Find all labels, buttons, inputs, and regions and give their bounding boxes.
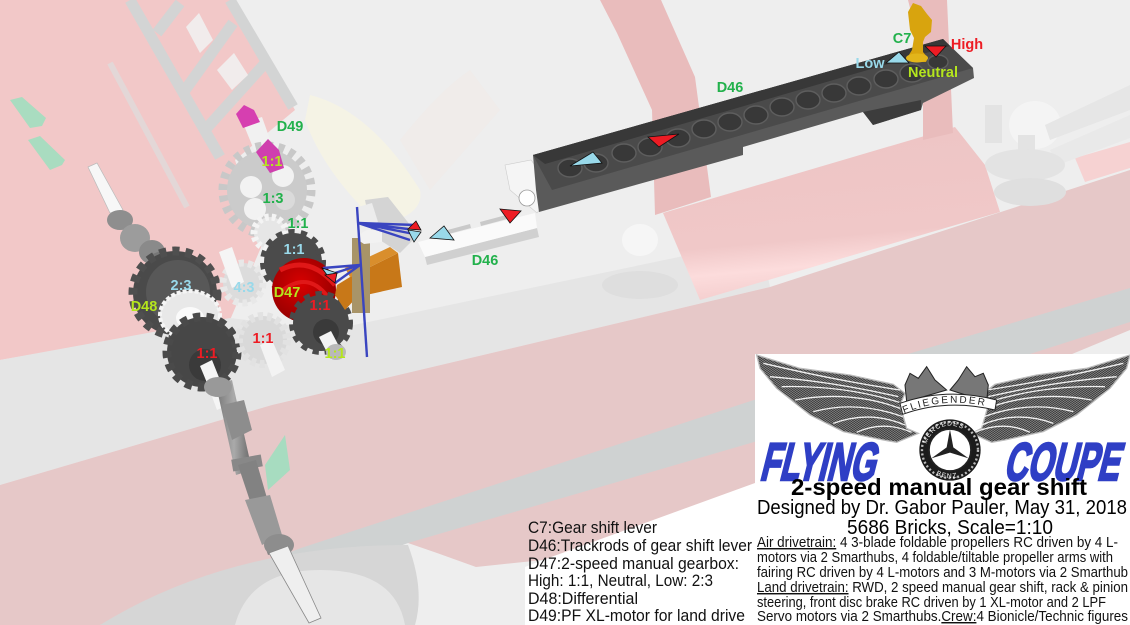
logo: Fliegender Mercedes-Benz winged badge: [756, 354, 1130, 481]
legend: part list: D48:Differential: [528, 590, 638, 608]
part labels: 1:1: [288, 216, 308, 232]
part labels: D46: [472, 253, 498, 269]
icon: low position triangles: [322, 52, 909, 275]
part labels: 1:1: [262, 154, 282, 170]
legend: part list: [528, 519, 752, 625]
logo: Fliegender Mercedes-Benz winged badge: MERCEDES: [922, 421, 964, 444]
icon: 2-speed gearbox gears: [239, 233, 349, 377]
text block: model description: Air drivetrain: 4 3-blade foldable propellers RC driven by 4 L-: [757, 535, 1118, 551]
white panel behind logo and text: [525, 354, 1130, 625]
icon: gold gear shift lever C7: [906, 3, 932, 62]
legend: part list: D49:PF XL-motor for land drive: [528, 607, 745, 625]
title: FLYING: FLYING: [756, 433, 886, 492]
icon: high position triangles: [325, 46, 946, 283]
logo: Fliegender Mercedes-Benz winged badge: BENZ: [936, 470, 957, 478]
legend: part list: D46:Trackrods of gear shift lever: [528, 537, 752, 555]
part labels: 1:3: [263, 191, 283, 207]
part labels: D48: [131, 299, 157, 315]
part labels: 1:1: [325, 346, 345, 362]
text block: model description: Servo motors via 2 Smarthubs.Crew:4 Bionicle/Technic figures: [757, 609, 1128, 625]
part labels: D46: [717, 80, 743, 96]
part labels: 4:3: [234, 280, 254, 296]
icon: 4:3 idler gear: [219, 247, 263, 303]
logo: Fliegender Mercedes-Benz winged badge: FLIEGENDER: [902, 396, 984, 413]
legend: part list: D47:2-speed manual gearbox:: [528, 555, 739, 573]
part labels: Low: [856, 56, 885, 72]
part labels: Neutral: [908, 65, 958, 81]
icon: dark gear shift track bar: [533, 39, 974, 212]
part labels: 1:1: [253, 331, 273, 347]
part labels: D49: [277, 119, 303, 135]
part labels: 1:1: [284, 242, 304, 258]
part labels: D47: [274, 285, 300, 301]
part labels: 1:1: [310, 298, 330, 314]
part labels: 2:3: [171, 278, 191, 294]
legend: part list: C7:Gear shift lever: [528, 519, 657, 537]
bricks and scale line: 5686 Bricks, Scale=1:10: [847, 517, 1053, 539]
icon: white shift linkage: [358, 160, 555, 265]
part labels: C7: [893, 31, 911, 47]
icon: driveshaft upper axle and joints: [88, 163, 168, 275]
blue shift indicator lines: [323, 207, 416, 357]
icon: motor gear assembly: [223, 105, 311, 249]
heading: 2-speed manual gear shift: 2-speed manual gear shift: [791, 474, 1087, 500]
part labels: 1:1: [197, 346, 217, 362]
part labels: [131, 31, 983, 362]
icon: orange shift fork and tan shaft: [335, 230, 402, 313]
text block: model description: [757, 535, 1128, 625]
icon: lower driveshaft: [203, 367, 321, 623]
legend: part list: High: 1:1, Neutral, Low: 2:3: [528, 572, 713, 590]
icon: differential gears: [133, 251, 237, 390]
part labels: High: [951, 37, 983, 53]
